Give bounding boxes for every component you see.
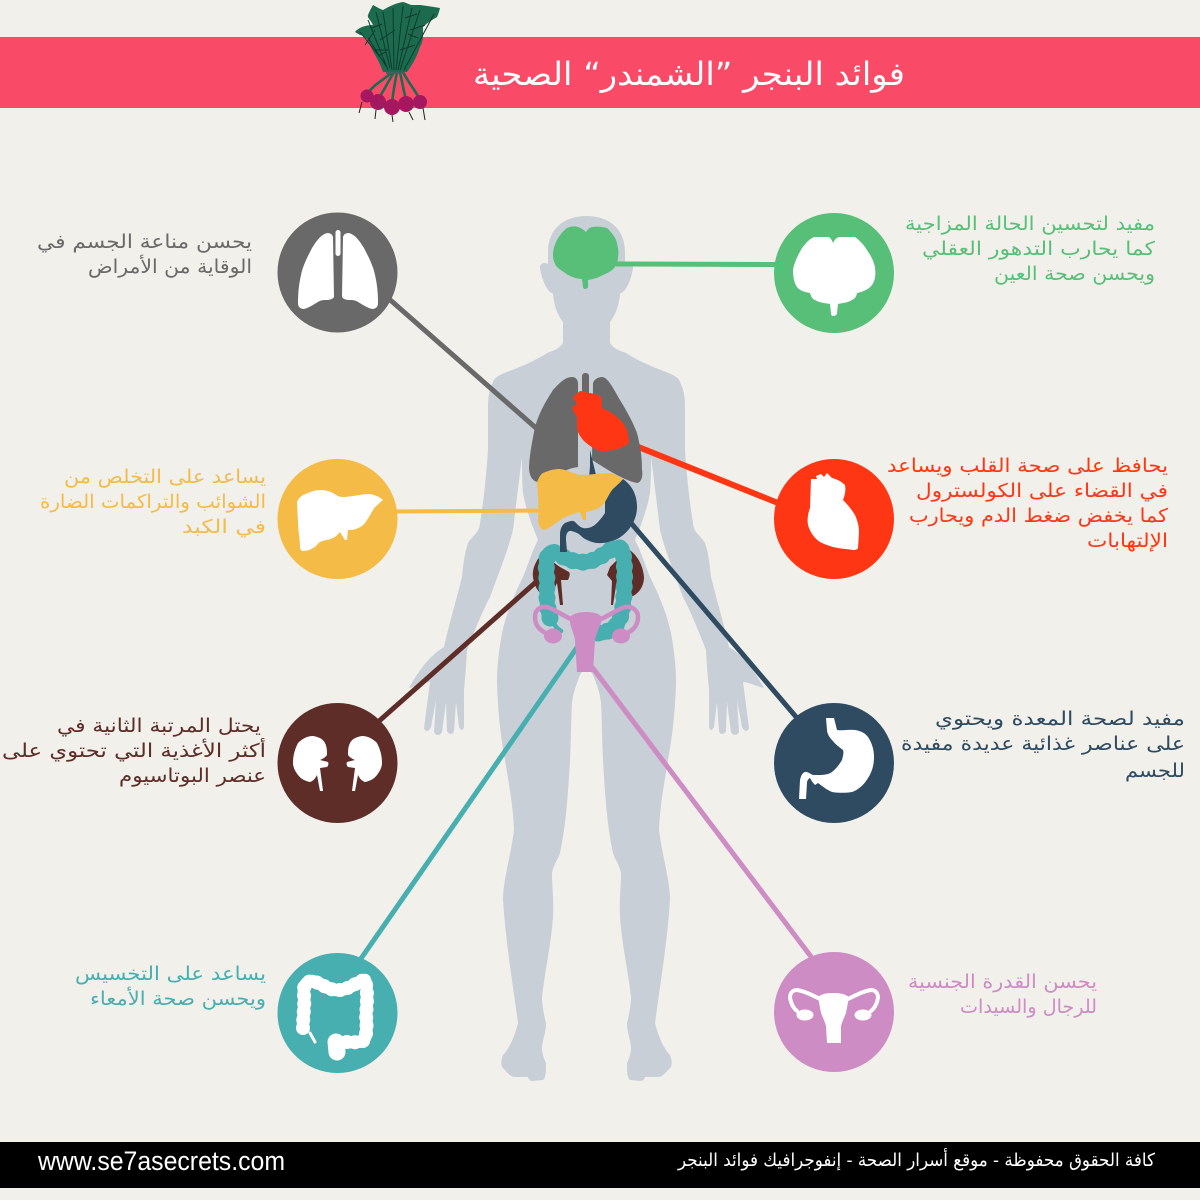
text: heart benefit: الإلتهابات (1087, 530, 1168, 552)
text: kidneys benefit: يحتل المرتبة الثانية في (57, 715, 261, 737)
text: heart benefit (887, 455, 1169, 552)
text: lungs benefit: يحسن مناعة الجسم في (37, 231, 252, 253)
panel: lungs benefit (37, 212, 398, 332)
text: reproductive benefit: يحسن القدرة الجنسية (908, 971, 1097, 993)
text: stomach benefit (901, 708, 1185, 782)
text: colon benefit: ويحسن صحة الأمعاء (90, 987, 266, 1010)
icon: uterus (790, 990, 878, 1043)
text: colon benefit: يساعد على التخسيس (75, 963, 266, 985)
organ: colon (546, 548, 625, 633)
panel: kidneys benefit (2, 703, 398, 823)
text: colon benefit (75, 963, 266, 1010)
text: liver benefit: في الكبد (182, 516, 266, 538)
text: heart benefit: يحافظ على صحة القلب ويساعد (887, 455, 1168, 477)
title: فوائد البنجر ”الشمندر“ الصحية (473, 55, 905, 93)
icon: liver (297, 490, 383, 551)
connector lines (360, 264, 812, 960)
text: brain benefit: كما يحارب التدهور العقلي (922, 238, 1156, 260)
text: kidneys benefit: أكثر الأغذية التي تحتوي على (2, 738, 266, 762)
text: kidneys benefit (2, 715, 266, 787)
body silhouette (409, 216, 764, 1081)
organ: esophagus and stomach (560, 450, 637, 552)
footer website: www.se7asecrets.com (37, 1146, 285, 1176)
text: reproductive benefit (908, 971, 1097, 1018)
text: stomach benefit: مفيد لصحة المعدة ويحتوي (935, 708, 1185, 730)
organ: liver (537, 469, 623, 530)
text: kidneys benefit: عنصر البوتاسيوم (119, 765, 266, 787)
panel: stomach benefit (774, 703, 1185, 823)
text: reproductive benefit: للرجال والسيدات (960, 996, 1097, 1018)
text: liver benefit (40, 466, 266, 538)
text: liver benefit: الشوائب والتراكمات الضارة (40, 491, 266, 513)
text: lungs benefit: الوقاية من الأمراض (88, 255, 252, 278)
icon: beet bunch (355, 2, 440, 122)
header band (0, 37, 1200, 108)
text: brain benefit: مفيد لتحسين الحالة المزاجية (905, 213, 1155, 235)
panel: brain benefit (774, 213, 1156, 333)
text: brain benefit: ويحسن صحة العين (994, 263, 1155, 285)
footer bar (0, 1142, 1200, 1188)
panel: reproductive benefit (774, 952, 1097, 1072)
organ: lungs (529, 373, 642, 483)
icon: stomach (799, 718, 874, 799)
text: heart benefit: في القضاء على الكولسترول (916, 480, 1168, 502)
panel: heart benefit (774, 455, 1169, 579)
text: brain benefit (905, 213, 1156, 285)
text: heart benefit: كما يخفض ضغط الدم ويحارب (909, 505, 1169, 527)
footer copyright: كافة الحقوق محفوظة - موقع أسرار الصحة - إنفوجرافيك فوائد البنجر (677, 1148, 1155, 1171)
organ: brain (553, 226, 618, 289)
text: stomach benefit: على عناصر غذائية عديدة مفيدة (901, 733, 1185, 755)
organ: kidneys (533, 549, 644, 605)
panel: liver benefit (40, 459, 398, 579)
icon: brain (793, 237, 875, 316)
text: lungs benefit (37, 231, 252, 278)
text: stomach benefit: للجسم (1125, 760, 1185, 782)
icon: kidneys (293, 736, 382, 791)
text: liver benefit: يساعد على التخلص من (64, 466, 266, 488)
organ: uterus (535, 607, 638, 672)
panel: colon benefit (75, 953, 398, 1073)
organ: heart (572, 391, 629, 451)
icon: lungs (298, 230, 378, 309)
icon: heart (808, 473, 859, 550)
icon: colon (303, 980, 367, 1052)
